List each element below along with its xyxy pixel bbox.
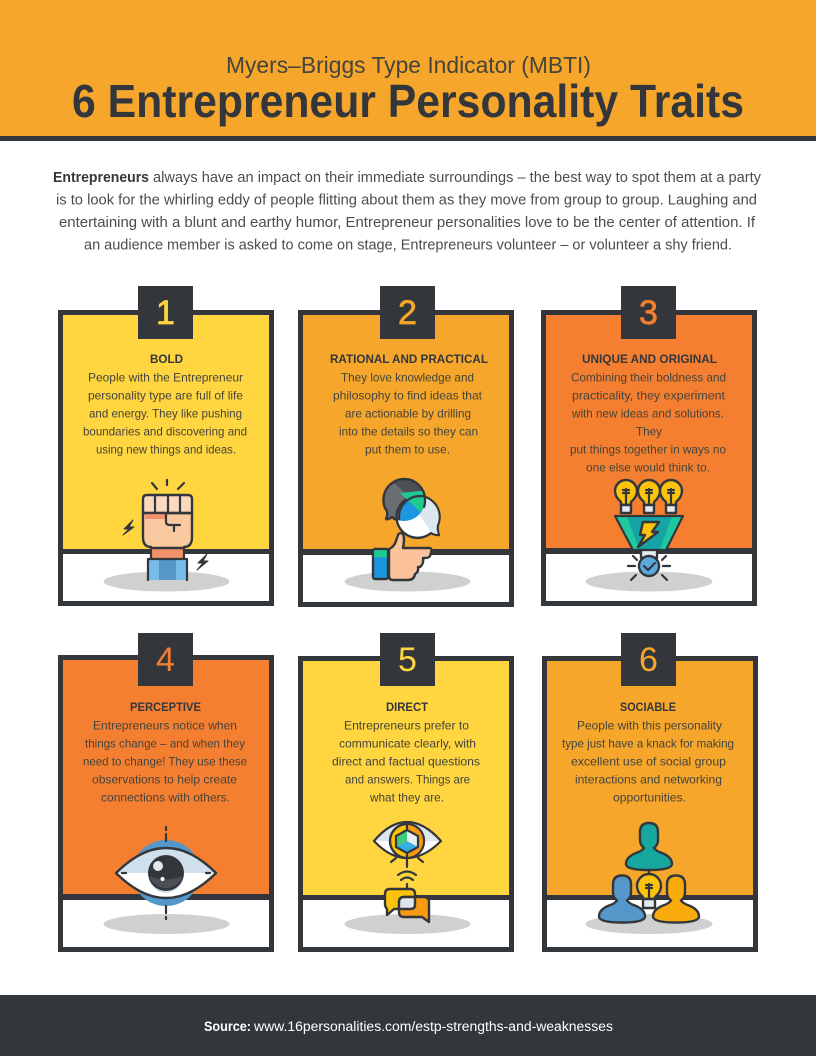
- subtitle: Myers–Briggs Type Indicator (MBTI): [226, 52, 591, 78]
- card 3 text: practicality, they experiment: [572, 388, 726, 402]
- card 1 text: and energy. They like pushing: [89, 406, 242, 420]
- card 3 text: one else would think to.: [586, 460, 710, 474]
- intro paragraph: is to look for the whirling eddy of people flitting about them as they move from group to group. Laughing and: [56, 192, 757, 208]
- card 2 text: [330, 352, 488, 456]
- card 1 text: using new things and ideas.: [96, 442, 236, 456]
- card 6 text: excellent use of social group: [571, 754, 726, 768]
- number badge 4: 4: [156, 641, 175, 679]
- number badge 4: [138, 633, 193, 686]
- card 4 text: need to change! They use these: [83, 754, 247, 768]
- icon shadow: [104, 914, 230, 934]
- card 4 text: [83, 700, 247, 804]
- icon: speech bubbles and thumbs up: [373, 479, 441, 580]
- number badge 2: [380, 286, 435, 339]
- card 2 text: put them to use.: [365, 442, 450, 456]
- card 5 text: [332, 700, 480, 804]
- card 3 text: [570, 352, 726, 474]
- card 5 text: DIRECT: [386, 700, 429, 714]
- intro paragraph: [53, 170, 762, 254]
- card 5 text: Entrepreneurs prefer to: [344, 718, 469, 732]
- number badge 5: 5: [398, 641, 417, 679]
- card 2 text: into the details so they can: [339, 424, 478, 438]
- card 2 text: are actionable by drilling: [345, 406, 471, 420]
- card 3 text: put things together in ways no: [570, 442, 726, 456]
- card 5 text: communicate clearly, with: [339, 736, 476, 750]
- number badge 6: 6: [639, 641, 658, 679]
- card 4 text: things change – and when they: [85, 736, 245, 750]
- card 5 text: direct and factual questions: [332, 754, 480, 768]
- panel: card 1 bold: [60, 286, 272, 604]
- card 2 text: philosophy to find ideas that: [333, 388, 483, 402]
- icon shadow: [344, 572, 470, 592]
- icon: light bulbs funnel and check: [615, 480, 683, 580]
- number badge 6: [621, 633, 676, 686]
- header band: [0, 0, 816, 141]
- card 1 text: personality type are full of life: [88, 388, 243, 402]
- number badge 3: [621, 286, 676, 339]
- card 2 text: RATIONAL AND PRACTICAL: [330, 352, 488, 366]
- title: 6 Entrepreneur Personality Traits: [72, 75, 744, 127]
- card 2 text: They love knowledge and: [341, 370, 474, 384]
- card 6 text: opportunities.: [613, 790, 686, 804]
- card 4 text: PERCEPTIVE: [130, 700, 201, 714]
- card 4 text: Entrepreneurs notice when: [93, 718, 237, 732]
- source citation: www.16personalities.com/estp-strengths-and-weaknesses: [253, 1019, 613, 1034]
- card 3 text: Combining their boldness and: [571, 370, 726, 384]
- number badge 1: [138, 286, 193, 339]
- panel: card 4 perceptive: [60, 633, 272, 950]
- intro paragraph: Entrepreneurs: [53, 170, 149, 186]
- card 1 text: People with the Entrepreneur: [88, 370, 243, 384]
- card 6 text: [562, 700, 734, 804]
- card 3 text: They: [636, 424, 662, 438]
- icon: eye: [116, 827, 216, 919]
- icon: raised fist: [123, 480, 208, 580]
- card 6 text: type just have a knack for making: [562, 736, 734, 750]
- panel: card 3 unique and original: [543, 286, 755, 604]
- number badge 1: 1: [156, 294, 175, 332]
- panel: card 5 direct: [300, 633, 512, 950]
- icon shadow: [586, 914, 712, 934]
- source citation: Source:: [204, 1019, 251, 1034]
- intro paragraph: entertaining with a blunt and earthy humor, Entrepreneur personalities love to be the center of attention. If: [59, 215, 756, 231]
- card 6 text: interactions and networking: [575, 772, 722, 786]
- intro paragraph: always have an impact on their immediate surroundings – the best way to spot them at a party: [153, 170, 762, 186]
- card 4 text: connections with others.: [101, 790, 230, 804]
- icon: team around a light bulb: [599, 823, 699, 922]
- card 3 text: with new ideas and solutions.: [571, 406, 724, 420]
- card 3 text: UNIQUE AND ORIGINAL: [582, 352, 717, 366]
- intro paragraph: an audience member is asked to come on stage, Entrepreneurs volunteer – or volunteer a shy friend.: [84, 238, 732, 254]
- card 5 text: what they are.: [369, 790, 444, 804]
- icon: eye with cube and chat bubbles: [374, 822, 441, 922]
- footer band: [0, 995, 816, 1056]
- number badge 3: 3: [639, 294, 658, 332]
- card 1 text: boundaries and discovering and: [83, 424, 247, 438]
- icon shadow: [104, 572, 230, 592]
- icon shadow: [344, 914, 470, 934]
- panel: card 2 rational and practical: [300, 286, 512, 604]
- card 6 text: People with this personality: [577, 718, 722, 732]
- card 5 text: and answers. Things are: [345, 772, 470, 786]
- panel: card 6 sociable: [544, 633, 756, 950]
- number badge 2: 2: [398, 294, 417, 332]
- icon shadow: [586, 572, 712, 592]
- card 1 text: [83, 352, 247, 456]
- card 1 text: BOLD: [150, 352, 183, 366]
- number badge 5: [380, 633, 435, 686]
- card 4 text: observations to help create: [92, 772, 237, 786]
- card 6 text: SOCIABLE: [620, 700, 676, 714]
